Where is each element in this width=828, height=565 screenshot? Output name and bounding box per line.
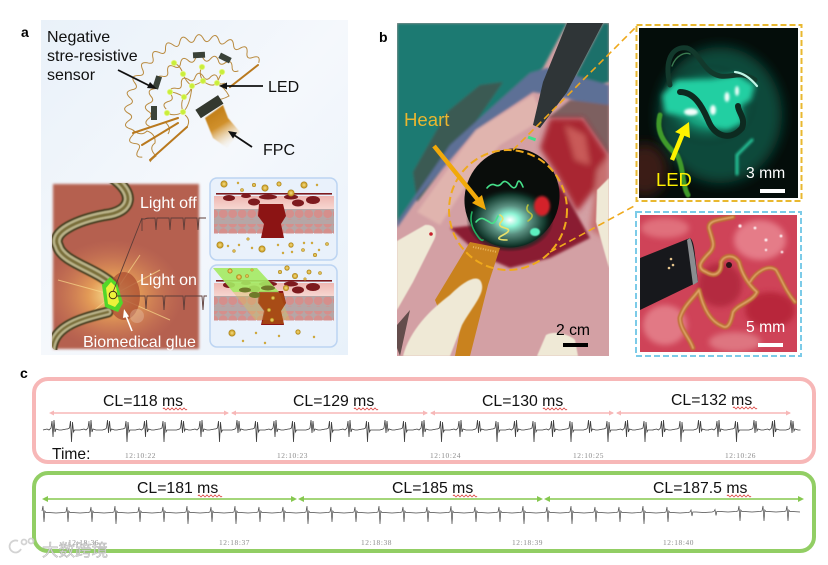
ECG trace: pink (43, 420, 800, 442)
cycle length labels: green (137, 480, 747, 497)
panel letter a: a (21, 24, 29, 40)
label: biomedical glue: Biomedical glue (83, 334, 196, 351)
label: light on: Light on (140, 272, 197, 289)
trace: light on (117, 296, 207, 310)
cycle length labels: pink (103, 392, 752, 410)
membrane panel: light on (210, 265, 337, 347)
label: LED: LED (268, 79, 299, 96)
scale bar: 2 cm (556, 322, 590, 347)
inset: device on heart (636, 212, 801, 356)
arrow: FPC pointer (228, 131, 252, 147)
label: negative stre-resistive sensor: sensor (47, 67, 96, 84)
inset: LED glowing (623, 25, 802, 201)
cycle length labels: pink: CL=130 ms (482, 393, 563, 410)
membrane panel: light off (210, 178, 337, 260)
span arrows: pink (49, 410, 791, 416)
watermark: 大数跨境 (42, 541, 108, 560)
timestamps: green: 12:18:40 (663, 538, 694, 547)
scale bar: 2 cm: 2 cm (556, 322, 590, 339)
timestamps: green: 12:18:36 (68, 538, 99, 547)
timestamps: pink: 12:10:26 (725, 451, 756, 460)
arrow: heart pointer (434, 146, 486, 210)
tissue illustration (43, 176, 199, 356)
dashed connector lines (513, 27, 636, 252)
panel letter b: b (379, 29, 388, 45)
cycle length labels: pink: CL=129 ms (293, 393, 374, 410)
timestamps: pink: 12:10:25 (573, 451, 604, 460)
spell-check underlines: green (198, 495, 751, 497)
watermark (10, 538, 108, 560)
timestamps: pink (125, 451, 756, 460)
panel a: device schematic and mechanism (21, 20, 348, 356)
cycle length labels: pink: CL=132 ms (671, 392, 752, 409)
panel c: green recording (34, 473, 814, 551)
trace: light off (113, 218, 206, 292)
arrow: LED yellow pointer (672, 122, 690, 160)
timestamps: green (68, 538, 694, 547)
arrow: LED pointer (219, 82, 263, 90)
photo: open chest with heart (397, 23, 609, 356)
timestamps: green: 12:18:37 (219, 538, 250, 547)
timestamps: pink: 12:10:22 (125, 451, 156, 460)
timestamps: green: 12:18:38 (361, 538, 392, 547)
timestamps: pink: 12:10:23 (277, 451, 308, 460)
cycle length labels: pink: CL=118 ms (103, 393, 183, 410)
span arrows: green (42, 496, 804, 502)
panel letter c: c (20, 365, 28, 381)
cycle length labels: green: CL=185 ms (392, 480, 473, 497)
scale bar: 3 mm: 3 mm (746, 165, 785, 182)
arrow: sensor pointer (118, 70, 157, 89)
label: LED yellow: LED (656, 169, 692, 190)
dashed circle around heart (449, 150, 567, 270)
label: negative stre-resistive sensor: Negative (47, 29, 110, 46)
label: time: Time: (52, 446, 90, 463)
label: light off: Light off (140, 195, 197, 212)
timestamps: pink: 12:10:24 (430, 451, 461, 460)
scale bar: 5 mm: 5 mm (746, 319, 785, 336)
label: negative stre-resistive sensor: stre-resistive (47, 48, 138, 65)
label: FPC: FPC (263, 142, 295, 159)
ECG trace: green (42, 506, 800, 524)
label: heart: Heart (404, 109, 450, 130)
serpentine fan device (125, 35, 259, 162)
label: negative stre-resistive sensor (47, 29, 138, 84)
cycle length labels: green: CL=181 ms (137, 480, 218, 497)
cycle length labels: green: CL=187.5 ms (653, 480, 747, 497)
scale bar: 5 mm (746, 319, 785, 347)
timestamps: green: 12:18:39 (512, 538, 543, 547)
panel c: pink recording (34, 379, 814, 463)
scale bar: 3 mm (746, 165, 785, 193)
arrow: glue pointer (123, 309, 132, 331)
spell-check underlines: pink (163, 407, 757, 410)
